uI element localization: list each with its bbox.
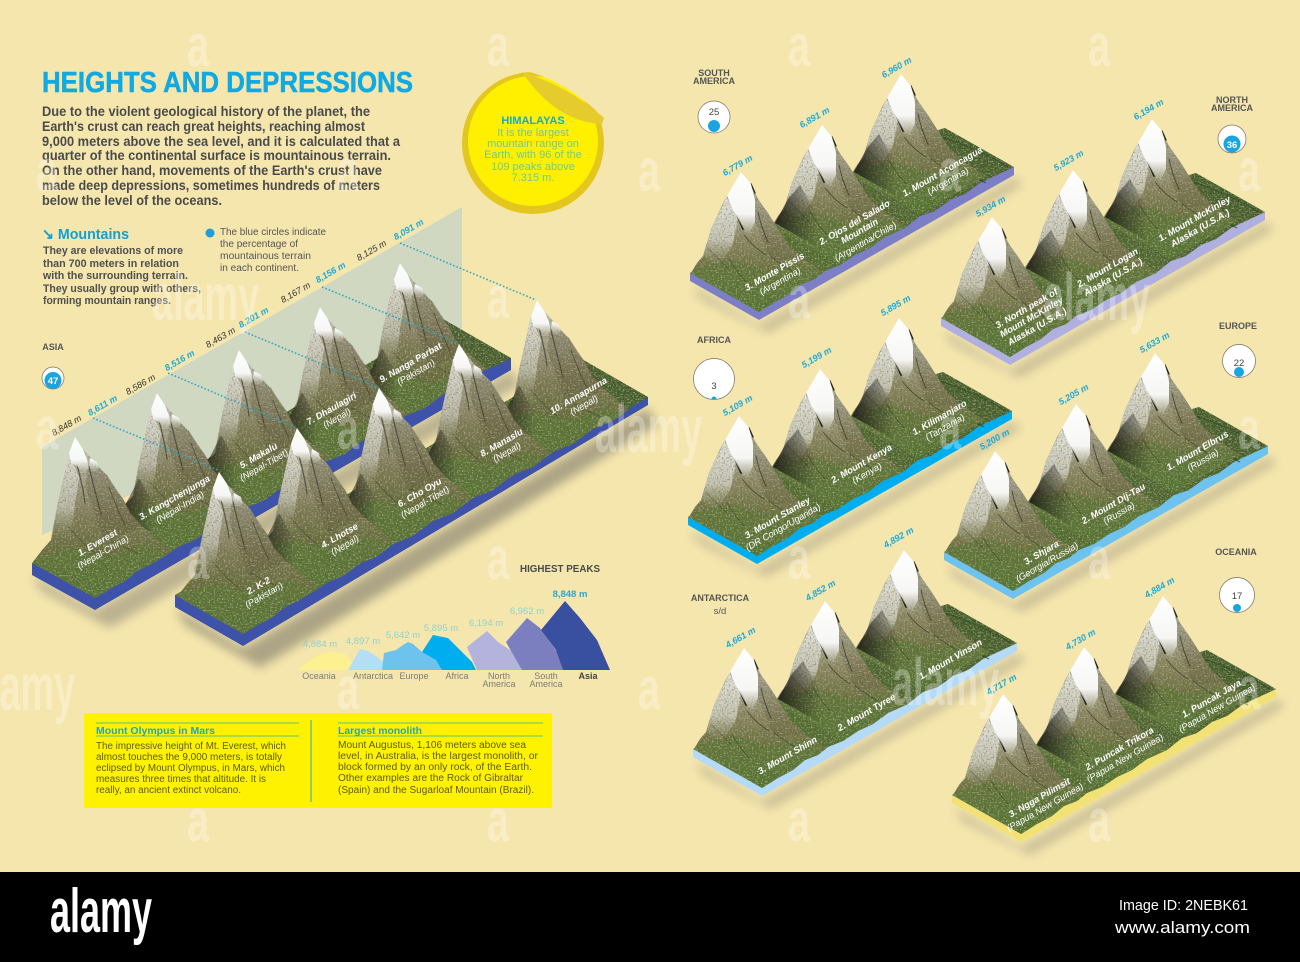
sticker: Himalayas: mountain range on	[487, 138, 579, 150]
chart: highest peaks: HIGHEST PEAKS	[520, 563, 600, 575]
block: Asia front row: (Pakistan)	[243, 580, 285, 610]
block: Oceania: (Papua New Guinea)	[1085, 732, 1165, 784]
continent marker: South America: 25	[709, 107, 719, 118]
watermark overlay: a	[638, 655, 660, 722]
block: Asia front row: (Nepal-Tibet)	[399, 484, 451, 520]
dotted leader lines	[93, 243, 536, 470]
block: North America: Alaska (U.S.A.)	[1005, 306, 1068, 348]
watermark overlay: a	[337, 655, 359, 722]
block: Asia front row: (Nepal)	[329, 533, 361, 557]
chart: highest peaks: Africa	[445, 671, 469, 681]
chart: highest peaks: South	[534, 671, 558, 681]
continent marker: Africa	[694, 335, 734, 400]
block: Asia front row: 8. Manaslu	[478, 426, 525, 459]
block: Oceania: 1. Puncak Jaya	[1180, 678, 1243, 720]
yellow callout panel: eclipsed by Mount Olympus, in Mars, which	[96, 763, 285, 774]
block: South America: 1. Mount Aconcagua	[901, 145, 984, 199]
block: Asia front row: (Nepal)	[568, 393, 600, 417]
Asia peak heights: 8,167 m	[279, 280, 313, 305]
watermark overlay: a	[1238, 395, 1260, 462]
watermark overlay: a	[337, 137, 359, 204]
continent marker: North America: 36	[1227, 140, 1237, 151]
block: Asia front row: 4. Lhotse	[318, 521, 360, 551]
block: Europe: (Russia)	[1102, 500, 1136, 526]
watermark overlay: a	[36, 137, 58, 204]
yellow callout panel: Mount Augustus, 1,106 meters above sea	[338, 740, 526, 751]
yellow callout panel: Mount Olympus in Mars	[96, 725, 215, 737]
block: Europe: 1. Mount Elbrus	[1165, 429, 1230, 472]
block: North America: Mount McKinley	[998, 295, 1066, 339]
block: South America: 2. Ojos del Salado	[816, 198, 892, 247]
yellow callout panel: block formed by an only rock, of the Earth.	[338, 762, 532, 773]
block: Europe: (Georgia/Russia)	[1014, 540, 1080, 584]
block: Africa: (DR Congo/Uganda)	[744, 502, 822, 553]
intro paragraph: Earth's crust can reach great heights, reaching almost	[42, 119, 365, 134]
continent marker: Antarctica	[691, 593, 750, 617]
watermark overlay: a	[36, 395, 58, 462]
intro paragraph: below the level of the oceans.	[42, 193, 222, 208]
intro paragraph: On the other hand, movements of the Earth's crust have	[42, 163, 382, 178]
block: Asia back row: (Nepal-China)	[75, 533, 131, 571]
Asia peak heights: 8,125 m	[355, 238, 389, 263]
block: Antarctica: 1. Mount Vinson	[917, 637, 984, 682]
Asia peak heights: 8,611 m	[86, 393, 119, 418]
block: Oceania	[952, 575, 1284, 855]
block: Asia back row: 7. Dhaulagiri	[305, 390, 359, 427]
heading: Mountains: ↘ Mountains	[42, 226, 129, 243]
watermark overlay: a	[1088, 525, 1110, 592]
block: Asia back row: (Nepal-Tibet)	[238, 447, 290, 483]
footer bar: www.alamy.com	[1114, 918, 1250, 937]
chart: highest peaks: 4,897 m	[346, 636, 380, 647]
legend: blue circles	[206, 227, 326, 274]
block: Africa: 3. Mount Stanley	[743, 494, 813, 540]
legend: blue circles: in each continent.	[220, 263, 299, 274]
watermark overlay: alamy	[152, 261, 259, 335]
legend: blue circles: the percentage of	[220, 239, 298, 250]
continent marker: Antarctica: s/d	[714, 606, 726, 617]
yellow callout panel: level, in Australia, is the largest monolith, or	[338, 751, 539, 762]
yellow callout panel: really, an ancient extinct volcano.	[96, 785, 241, 796]
footer bar	[0, 872, 1300, 962]
continent marker: North America: AMERICA	[1211, 103, 1253, 113]
continent marker: North America	[1211, 95, 1253, 153]
block: Asia back row: (Nepal)	[321, 406, 353, 430]
block: Asia back row: (Nepal-India)	[154, 489, 206, 525]
Asia peak heights	[50, 217, 425, 438]
continent marker: Africa: AFRICA	[697, 335, 731, 345]
Asia peak heights: 8,586 m	[124, 372, 158, 397]
watermark overlay: a	[1238, 137, 1260, 204]
block: Europe: 5,205 m	[1057, 382, 1090, 407]
label: Asia: 47	[48, 376, 58, 387]
block: Europe	[944, 330, 1276, 612]
watermark overlay: alamy	[595, 393, 702, 467]
chart: highest peaks: America	[529, 679, 563, 689]
continent marker: Oceania: 17	[1232, 591, 1242, 602]
continent marker: South America: SOUTH	[698, 68, 730, 78]
block: Asia back row: 5. Makalu	[238, 441, 279, 470]
mountains description	[42, 245, 201, 307]
block: Asia front row: 10. Annapurna	[548, 375, 609, 416]
watermark overlay: a	[487, 787, 509, 854]
block: Asia back row: 3. Kangchenjunga	[137, 473, 212, 522]
block: North America: 2. Mount Logan	[1074, 246, 1140, 290]
legend: blue circles: mountainous terrain	[220, 251, 311, 262]
block: North America: 5,934 m	[974, 194, 1007, 219]
block: Asia back row: 9. Nanga Parbat	[378, 340, 444, 385]
chart: highest peaks: 6,962 m	[510, 606, 544, 617]
yellow callout panel: (Spain) and the Sugarloaf Mountain (Brazil).	[338, 785, 534, 796]
block: Oceania: 4,730 m	[1063, 627, 1097, 652]
intro paragraph: Due to the violent geological history of the planet, the	[42, 104, 370, 119]
block: Antarctica: 2. Mount Tyree	[835, 692, 897, 734]
footer bar: Image ID: 2NEBK61	[1119, 897, 1248, 914]
block: Antarctica: 4,852 m	[803, 578, 837, 603]
watermark overlay: a	[1088, 787, 1110, 854]
block: Asia front row: 6. Cho Oyu	[396, 476, 444, 509]
block: Europe: 3. Shjara	[1022, 539, 1061, 567]
block: Africa: 5,109 m	[721, 393, 754, 418]
watermark overlay: a	[788, 525, 810, 592]
watermark overlay: a	[187, 787, 209, 854]
yellow callout panel: The impressive height of Mt. Everest, which	[96, 741, 286, 752]
chart: highest peaks: Antarctica	[353, 671, 393, 681]
watermark overlay: a	[788, 264, 810, 331]
block: Europe: 2. Mount Dij-Tau	[1079, 481, 1147, 526]
block: Oceania: 3. Ngga Pilimsit	[1007, 776, 1073, 819]
mountains description: with the surrounding terrain.	[42, 270, 188, 282]
continent marker: Oceania	[1215, 547, 1257, 612]
continent marker: North America: NORTH	[1216, 95, 1248, 105]
block: South America	[690, 55, 1022, 333]
block: South America: Mountain	[839, 216, 880, 246]
watermark overlay: a	[939, 137, 961, 204]
chart: highest peaks: 4,884 m	[303, 639, 337, 650]
block: Africa: 5,895 m	[879, 293, 912, 318]
watermark overlay: a	[187, 12, 209, 79]
block: Oceania: 4,717 m	[984, 672, 1018, 697]
Asia peak heights: 8,516 m	[163, 348, 196, 373]
block: Europe: (Russia)	[1186, 447, 1220, 473]
title: HEIGHTS AND DEPRESSIONS	[42, 67, 413, 99]
watermark overlay: alamy	[1043, 261, 1150, 335]
block: Europe: 5,200 m	[978, 427, 1011, 452]
Asia peak heights: 8,201 m	[237, 305, 270, 330]
block: South America: 6,960 m	[880, 55, 913, 80]
block: North America: Alaska (U.S.A.)	[1168, 207, 1231, 250]
block: Oceania: 4,884 m	[1142, 575, 1176, 600]
chart: highest peaks: 5,642 m	[386, 630, 420, 641]
block: Africa: (Tanzania)	[924, 412, 966, 442]
mountains description: They are elevations of more	[43, 245, 183, 257]
mountains description: forming mountain ranges.	[43, 295, 171, 307]
sticker: Himalayas: HIMALAYAS	[501, 115, 565, 127]
watermark overlay: a	[487, 12, 509, 79]
block: North America: 3. North peak of	[994, 286, 1060, 330]
chart: highest peaks: 8,848 m	[553, 589, 587, 600]
continent marker: South America	[693, 68, 735, 133]
block: Asia back row: (Pakistan)	[395, 357, 437, 387]
yellow callout panel: measures three times that altitude. It is	[96, 774, 266, 785]
chart: highest peaks: 5,895 m	[424, 623, 458, 634]
sticker: Himalayas	[462, 58, 612, 214]
legend: blue circles: The blue circles indicate	[220, 227, 326, 238]
sticker: Himalayas: Earth, with 96 of the	[484, 149, 582, 161]
continent marker: Oceania: OCEANIA	[1215, 547, 1257, 557]
watermark overlay: a	[1088, 12, 1110, 79]
block: Asia front row: 2. K-2	[244, 575, 273, 597]
block: Antarctica: 3. Mount Shinn	[756, 734, 819, 776]
intro paragraph: made deep depressions, sometimes hundreds of meters	[42, 178, 380, 193]
block: South America: 3. Monte Pissis	[743, 251, 806, 293]
watermark overlay: a	[638, 137, 660, 204]
chart: highest peaks: North	[488, 671, 510, 681]
yellow callout panel: Largest monolith	[338, 725, 422, 737]
continent marker: Europe	[1219, 321, 1257, 378]
sticker: Himalayas: 7.315 m.	[512, 172, 554, 184]
block: Asia front row: (Nepal)	[491, 440, 523, 464]
block: North America: 6,194 m	[1132, 97, 1165, 122]
block: South America: (Argentina)	[758, 265, 802, 297]
footer bar: alamy	[50, 877, 152, 946]
watermark overlay: a	[487, 525, 509, 592]
block: North America	[941, 97, 1273, 378]
watermark overlay: a	[187, 525, 209, 592]
chart: highest peaks: 6,194 m	[469, 618, 503, 629]
chart: highest peaks: America	[482, 679, 516, 689]
intro paragraph: 9,000 meters above the sea level, and it is calculated that a	[42, 134, 400, 149]
Asia peak heights: 8,848 m	[50, 413, 84, 438]
sticker: Himalayas: 109 peaks above	[491, 161, 575, 173]
block: Antarctica: 4,892 m	[881, 525, 915, 550]
block: Antarctica	[693, 525, 1025, 809]
block: South America: (Argentina/Chile)	[833, 220, 898, 263]
chart: highest peaks: Oceania	[302, 671, 336, 681]
block: Europe: 5,633 m	[1138, 330, 1171, 355]
block: South America: (Argentina)	[926, 165, 970, 197]
yellow callout panel: Other examples are the Rock of Gibraltar	[338, 773, 524, 784]
continent marker: South America: AMERICA	[693, 76, 735, 86]
Asia peak heights: 8,156 m	[314, 260, 347, 285]
mountains description: They usually group with others,	[43, 283, 201, 295]
block: Africa: 5,199 m	[800, 345, 833, 370]
watermark overlay: a	[788, 787, 810, 854]
block: Oceania: 2. Puncak Trikora	[1083, 725, 1155, 773]
sticker: Himalayas: It is the largest	[497, 127, 569, 139]
block: North America: 1. Mount McKinley	[1157, 194, 1233, 243]
block: Africa: 2. Mount Kenya	[828, 442, 894, 486]
continent marker: Europe: EUROPE	[1219, 321, 1257, 331]
continent marker: Europe: 22	[1234, 358, 1244, 369]
block: Asia back row	[32, 263, 520, 628]
intro paragraph	[42, 104, 400, 208]
yellow callout panel: almost touches the 9,000 meters, is totally	[96, 752, 282, 763]
Asia peak heights: 8,463 m	[204, 325, 238, 350]
block: North America: 5,923 m	[1052, 148, 1085, 173]
block: Oceania: (Papua New Guinea)	[1177, 682, 1257, 734]
watermark overlay: a	[487, 264, 509, 331]
watermark overlay: a	[337, 395, 359, 462]
watermark overlay: a	[939, 395, 961, 462]
watermark overlay: a	[1238, 655, 1260, 722]
block: Antarctica: 4,661 m	[723, 625, 757, 650]
label: Asia	[42, 342, 64, 389]
label: Asia: ASIA	[42, 342, 64, 352]
chart: highest peaks: Europe	[399, 671, 429, 681]
yellow callout panel	[84, 713, 552, 808]
block: South America: 6,891 m	[798, 105, 831, 130]
block: Africa: 1. Kilimanjaro	[911, 398, 969, 437]
block: North America: Alaska (U.S.A.)	[1081, 256, 1144, 299]
height panel behind Asia range	[42, 207, 462, 535]
intro paragraph: quarter of the continental surface is mountainous terrain.	[42, 148, 391, 163]
Asia peak heights: 8,091 m	[392, 217, 425, 242]
block: Asia back row: 1. Everest	[76, 527, 120, 558]
block: Africa	[688, 293, 1020, 577]
block: South America: 6,779 m	[721, 153, 754, 178]
watermark overlay: a	[788, 12, 810, 79]
block: Asia front row	[175, 300, 657, 668]
watermark overlay: alamy	[892, 646, 999, 720]
continent marker: Antarctica: ANTARCTICA	[691, 593, 750, 603]
chart: highest peaks: Asia	[578, 671, 598, 681]
continent marker: Africa: 3	[711, 381, 717, 392]
block: Africa: (Kenya)	[850, 461, 884, 486]
block: Oceania: (Papua New Guinea)	[1005, 781, 1085, 833]
mountains description: than 700 meters in relation	[43, 258, 179, 270]
chart: highest peaks	[297, 563, 610, 689]
